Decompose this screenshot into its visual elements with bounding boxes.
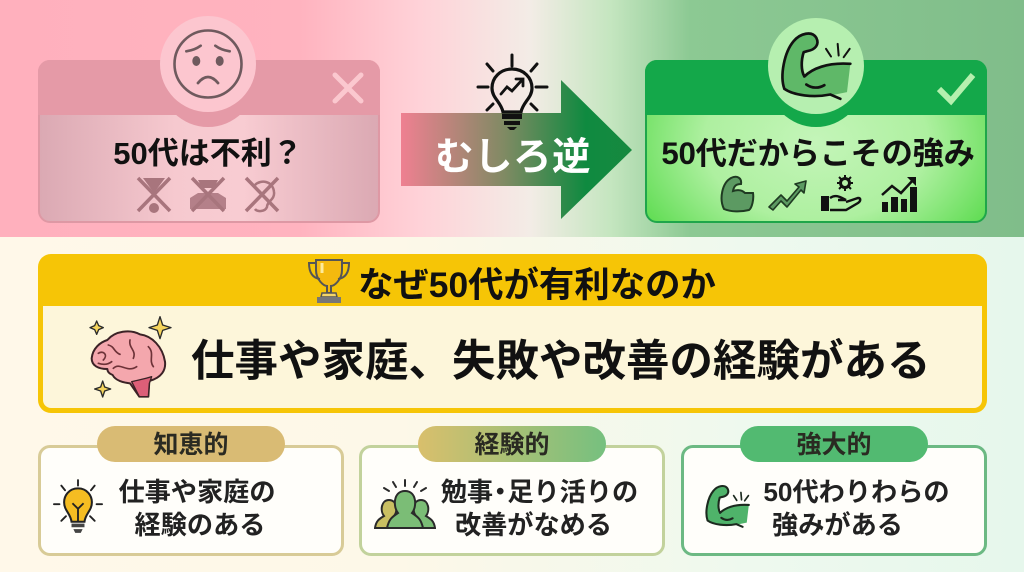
icon: worried face badge bbox=[160, 16, 256, 112]
icon: crossed briefcase bbox=[190, 176, 226, 212]
heading: strength of 50s: 50代だからこその強み bbox=[661, 136, 975, 171]
icon: x mark bbox=[332, 72, 364, 104]
icon: hand with gear bbox=[821, 175, 862, 212]
header bump bbox=[768, 68, 864, 127]
text: 勉事・足り活りの bbox=[441, 477, 638, 507]
icon: small muscle bbox=[720, 176, 754, 212]
panel: disadvantage card bbox=[38, 60, 380, 223]
card header bbox=[38, 60, 380, 115]
text: 仕事や家庭の bbox=[118, 477, 276, 507]
card body bbox=[38, 60, 380, 223]
label: experience bbox=[418, 426, 606, 462]
panel: experience bbox=[359, 445, 665, 556]
icon: bar chart with arrow bbox=[881, 177, 917, 212]
arrow shape bbox=[401, 80, 632, 219]
arrow: rather the opposite bbox=[401, 80, 632, 219]
icon: zigzag growth arrow bbox=[768, 180, 807, 211]
icon: check mark bbox=[937, 73, 976, 106]
background: top band bbox=[0, 0, 1024, 237]
label: wisdom: 知恵的 bbox=[153, 431, 228, 459]
header bump bbox=[160, 68, 256, 127]
panel: wisdom bbox=[38, 445, 344, 556]
label: strength bbox=[740, 426, 928, 462]
background: bottom band bbox=[0, 237, 1024, 572]
heading: 50s disadvantage: 50代は不利？ bbox=[113, 136, 303, 171]
icon: muscle bbox=[705, 485, 750, 528]
icon: light bulb with growth arrow bbox=[476, 54, 548, 130]
text bbox=[118, 477, 276, 540]
heading: why: なぜ50代が有利なのか bbox=[358, 265, 716, 305]
worried face bbox=[173, 29, 243, 99]
icon: people bbox=[374, 479, 436, 529]
panel: strength card bbox=[645, 60, 987, 223]
text line two: 強みがある bbox=[772, 510, 903, 540]
card header bbox=[645, 60, 987, 115]
text bbox=[441, 477, 638, 540]
panel inner bbox=[43, 306, 982, 408]
label: experience: 経験的 bbox=[474, 431, 550, 459]
main statement: 仕事や家庭、失敗や改善の経験がある bbox=[191, 338, 930, 386]
label: wisdom bbox=[97, 426, 285, 462]
icon: trophy bbox=[308, 259, 350, 303]
arrow label: むしろ逆 bbox=[435, 136, 591, 179]
card body bbox=[645, 60, 987, 223]
icon: light bulb bbox=[53, 479, 103, 533]
flexed arm bbox=[781, 32, 852, 100]
label: strength: 強大的 bbox=[796, 431, 872, 459]
icon: crossed ear bbox=[244, 176, 280, 212]
icon: crossed hourglass bbox=[136, 176, 172, 213]
panel: why 50s advantage bbox=[38, 254, 987, 413]
icon: muscle badge bbox=[768, 18, 864, 114]
icon: brain with sparkles bbox=[89, 316, 172, 398]
panel: strength bbox=[681, 445, 987, 556]
text: 経験のある bbox=[135, 510, 265, 540]
text line one: 50代わりわらの bbox=[763, 477, 950, 507]
text: 改善がなめる bbox=[455, 510, 612, 540]
